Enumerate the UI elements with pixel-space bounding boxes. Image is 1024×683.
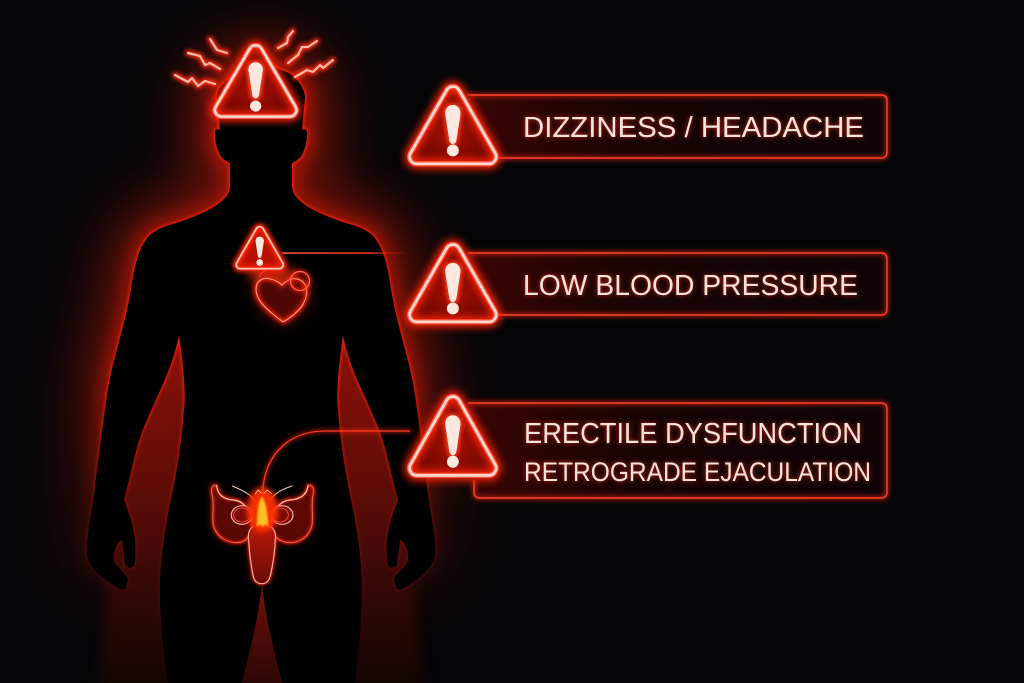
panel: low blood pressure [410,245,887,322]
icon: reproductive organs [211,485,314,584]
warning icon [410,397,496,475]
warning icon [410,245,496,322]
connector: reproductive organ to erectile dysfunction [263,431,412,495]
panel box [462,253,887,315]
icon: jagged pain lines around head [175,31,333,86]
head warning triangle [215,45,296,117]
label text: DIZZINESS / HEADACHE [523,112,864,144]
arm gaps tinted red [340,320,425,683]
label text line 1: ERECTILE DYSFUNCTION [524,418,862,450]
label text: DIZZINESS / HEADACHE [523,112,864,144]
connector: heart to low blood pressure [282,252,408,254]
label text line 2: RETROGRADE EJACULATION [524,457,871,487]
panel box [462,95,887,158]
panel box [462,403,887,498]
label text: LOW BLOOD PRESSURE [523,270,858,302]
label text line 2: RETROGRADE EJACULATION [524,457,871,487]
body silhouette with red glow [87,66,435,683]
panel: dizziness / headache [410,87,887,164]
chest warning triangle [236,227,283,269]
panel: erectile dysfunction / retrograde ejaculation [410,397,887,498]
warning icon [410,87,496,164]
icon: heart [248,266,310,322]
label text line 1: ERECTILE DYSFUNCTION [524,418,862,450]
label text: LOW BLOOD PRESSURE [523,270,858,302]
